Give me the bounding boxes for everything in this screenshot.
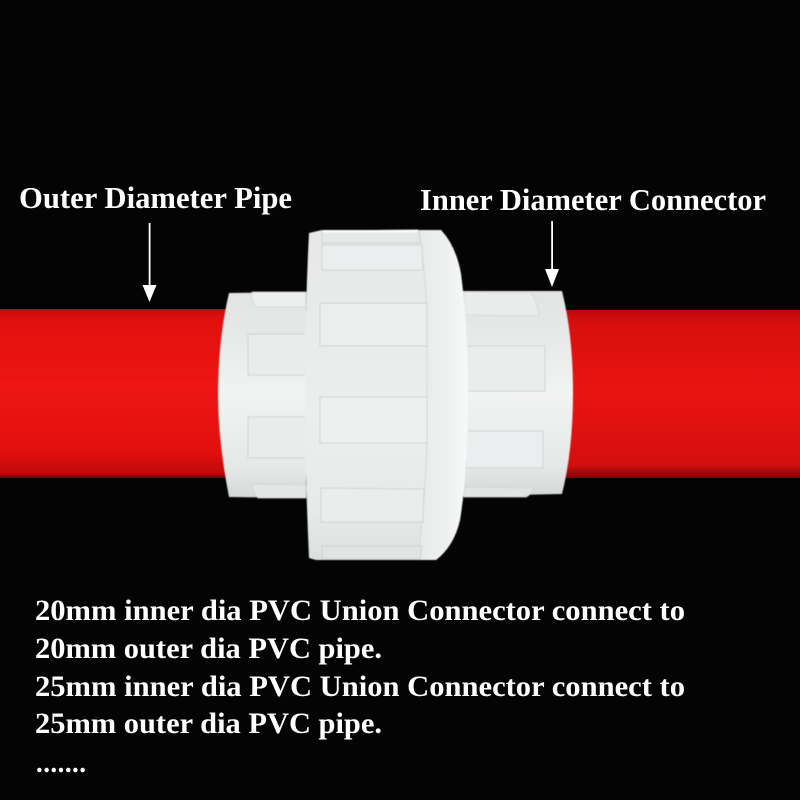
description text: ....... bbox=[36, 748, 86, 778]
union nut bbox=[305, 230, 468, 560]
description text bbox=[35, 595, 685, 778]
heading: inner diameter connector: Inner Diameter Connector bbox=[420, 183, 766, 217]
description text: 20mm inner dia PVC Union Connector connect to bbox=[35, 595, 685, 627]
left red pipe bbox=[0, 309, 226, 478]
heading: outer diameter pipe: Outer Diameter Pipe bbox=[19, 181, 292, 215]
arrow: inner diameter connector bbox=[545, 221, 559, 287]
nut ribs bbox=[320, 230, 427, 559]
arrow: outer diameter pipe bbox=[142, 223, 156, 302]
left socket bbox=[218, 292, 306, 498]
nut collar bbox=[417, 230, 468, 560]
description text: 25mm inner dia PVC Union Connector connect to bbox=[35, 671, 685, 703]
description text: 25mm outer dia PVC pipe. bbox=[35, 708, 382, 740]
right socket bbox=[462, 291, 573, 497]
PVC union connector bbox=[218, 230, 573, 560]
description text: 20mm outer dia PVC pipe. bbox=[35, 633, 382, 665]
right red pipe bbox=[560, 310, 800, 478]
